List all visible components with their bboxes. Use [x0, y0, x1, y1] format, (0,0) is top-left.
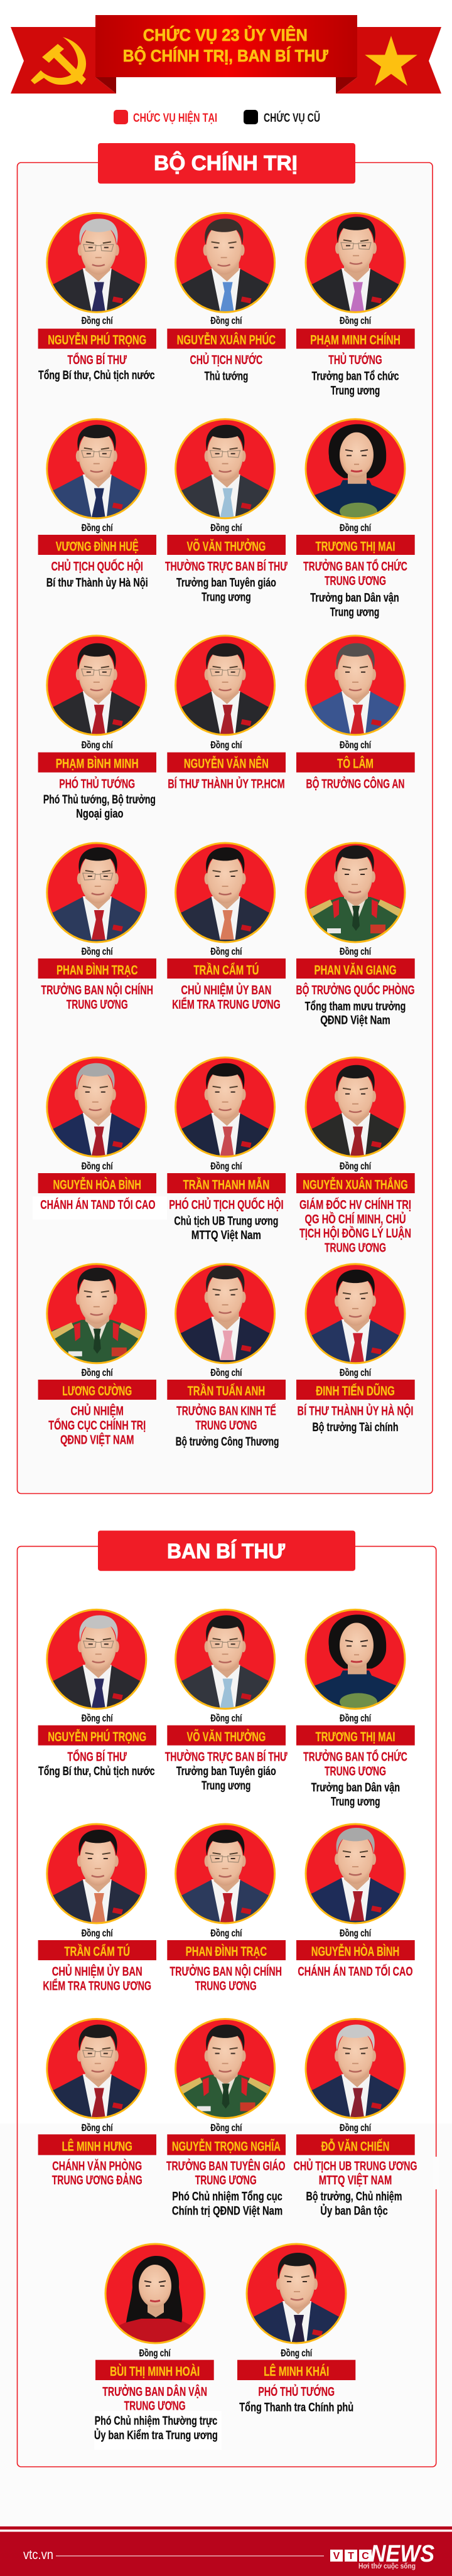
name bar: NGUYỄN HÒA BÌNH — [311, 1943, 399, 1959]
footer rule — [56, 2556, 324, 2557]
label: Đồng chí — [210, 1714, 242, 1724]
current position: PHÓ THỦ TƯỚNG — [258, 2384, 335, 2399]
name bar — [296, 1940, 415, 1960]
portrait — [175, 212, 276, 313]
label: Đồng chí — [210, 316, 242, 326]
source text: vtc.vn — [23, 2548, 53, 2562]
label: Đồng chí — [340, 1368, 372, 1378]
portrait — [46, 842, 147, 943]
portrait — [305, 1056, 406, 1157]
name bar — [296, 2134, 415, 2155]
current position: TRƯỞNG BAN TUYÊN GIÁO — [166, 2159, 286, 2174]
card: Nguyễn Trọng Nghĩa — [166, 2019, 286, 2218]
former position — [311, 369, 399, 398]
portrait — [305, 418, 406, 520]
label: Đồng chí — [82, 2123, 113, 2133]
former position — [176, 1764, 276, 1793]
current position: TRUNG ƯƠNG — [67, 997, 128, 1012]
label: Đồng chí — [82, 1928, 113, 1939]
current position — [294, 2159, 417, 2187]
current position: TỔNG BÍ THƯ — [67, 352, 127, 367]
current position: TRUNG ƯƠNG — [325, 1764, 386, 1778]
former position — [305, 999, 406, 1027]
heading: Bộ Chính trị — [98, 143, 355, 183]
current position: CHÁNH VĂN PHÒNG — [52, 2159, 142, 2174]
current position: CHỦ NHIỆM ỦY BAN — [181, 982, 271, 997]
name bar: PHAN ĐÌNH TRẠC — [56, 962, 137, 978]
name bar — [296, 1173, 415, 1193]
card: Nguyễn Xuân Phúc — [167, 213, 286, 383]
name bar — [296, 1725, 415, 1746]
former position: Chính trị QĐND Việt Nam — [172, 2204, 282, 2218]
name bar: VÕ VĂN THƯỞNG — [187, 1729, 266, 1744]
card: Võ Văn Thưởng — [165, 419, 288, 604]
name bar: NGUYỄN XUÂN PHÚC — [177, 331, 276, 348]
label: Đồng chí — [210, 740, 242, 751]
portrait — [40, 1824, 153, 1930]
former position: Trưởng ban Dân vận — [311, 1781, 400, 1795]
label: Đồng chí — [340, 2123, 372, 2133]
current position: THỦ TƯỚNG — [328, 352, 382, 367]
name bar: NGUYỄN PHÚ TRỌNG — [48, 1728, 146, 1744]
name bar — [95, 2360, 214, 2380]
portrait — [299, 2019, 412, 2125]
former position: Tổng tham mưu trưởng — [305, 999, 406, 1013]
former position: Trung ương — [202, 590, 251, 604]
card: Trương Thị Mai — [296, 1609, 415, 1809]
heading: Bộ Chính trị: BỘ CHÍNH TRỊ — [154, 151, 298, 174]
current position: TRUNG ƯƠNG — [195, 1978, 257, 1993]
current position — [43, 1964, 151, 1993]
label: Đồng chí — [82, 1161, 113, 1172]
current position: TRUNG ƯƠNG ĐẢNG — [52, 2173, 143, 2187]
logo: VTC News: V — [333, 2551, 340, 2562]
current position — [299, 1197, 411, 1255]
name bar — [38, 1173, 156, 1193]
card: Nguyễn Hòa Bình — [38, 1058, 156, 1212]
card: Phạm Bình Minh — [38, 636, 156, 821]
name bar — [38, 2134, 156, 2155]
name bar — [167, 2134, 286, 2155]
current position: TỔNG CỤC CHÍNH TRỊ — [48, 1418, 146, 1433]
name bar: TRẦN CẨM TÚ — [64, 1943, 130, 1959]
current position: TRƯỞNG BAN TỔ CHỨC — [303, 1749, 407, 1764]
card: Tô Lâm — [296, 636, 415, 791]
current position: CHỦ NHIỆM — [70, 1403, 124, 1419]
card: Trần Cẩm Tú — [38, 1824, 156, 1993]
current position: TRUNG ƯƠNG — [195, 1419, 257, 1433]
former position: Chủ tịch UB Trung ương — [174, 1214, 278, 1228]
current position — [48, 1403, 146, 1447]
name bar: LÊ MINH HƯNG — [62, 2138, 132, 2154]
former position: Bộ trưởng Tài chính — [313, 1420, 398, 1434]
card: Nguyễn Phú Trọng — [38, 1609, 156, 1778]
current position: KIỂM TRA TRUNG ƯƠNG — [43, 1978, 151, 1993]
name bar: LÊ MINH KHÁI — [264, 2363, 329, 2379]
former position — [43, 793, 156, 821]
logo: VTC News: T — [348, 2551, 354, 2562]
card: Vương Đình Huệ — [38, 419, 156, 590]
name bar — [167, 1173, 286, 1193]
portrait — [46, 212, 147, 313]
current position: TRƯỞNG BAN DÂN VẬN — [102, 2384, 207, 2399]
former position: Phó Chủ nhiệm Thường trực — [95, 2414, 217, 2428]
name bar: VƯƠNG ĐÌNH HUỆ — [56, 539, 139, 554]
name bar — [167, 753, 286, 773]
current position: TRUNG ƯƠNG — [195, 2173, 257, 2187]
card: Nguyễn Phú Trọng — [38, 213, 156, 382]
card: Lê Minh Hưng — [38, 2019, 156, 2187]
name bar: BÙI THỊ MINH HOÀI — [110, 2363, 200, 2379]
name bar — [38, 1725, 156, 1746]
portrait — [175, 418, 276, 520]
card: Nguyễn Xuân Thắng — [296, 1058, 415, 1255]
name bar — [237, 2360, 355, 2380]
former position: Trung ương — [331, 1795, 380, 1809]
name bar: NGUYỄN PHÚ TRỌNG — [48, 331, 146, 348]
former position: Trưởng ban Dân vận — [310, 591, 399, 605]
former position: Phó Thủ tướng, Bộ trưởng — [43, 793, 156, 807]
current position: PHÓ CHỦ TỊCH QUỐC HỘI — [169, 1197, 284, 1212]
portrait — [175, 635, 276, 736]
name bar: TRẦN THANH MẪN — [183, 1176, 269, 1193]
label: Đồng chí — [82, 1714, 113, 1724]
current position: BỘ TRƯỞNG CÔNG AN — [306, 776, 404, 791]
portrait — [305, 635, 406, 736]
former position: Trưởng ban Tuyên giáo — [176, 576, 276, 590]
portrait — [175, 1056, 276, 1157]
current position — [303, 559, 407, 588]
label: Đồng chí — [210, 2123, 242, 2133]
card: Phan Đình Trạc — [167, 1824, 286, 1993]
former position: Tổng Bí thư, Chủ tịch nước — [38, 1764, 155, 1778]
name bar: ĐỖ VĂN CHIẾN — [321, 2137, 389, 2154]
card: Đinh Tiến Dũng — [296, 1264, 415, 1434]
current position — [176, 1403, 276, 1433]
card: Lê Minh Khái — [237, 2244, 355, 2414]
portrait — [299, 1824, 412, 1928]
portrait — [46, 1608, 147, 1710]
card: Đỗ Văn Chiến — [294, 2019, 439, 2218]
former position: Trưởng ban Tổ chức — [311, 369, 399, 383]
title — [123, 24, 328, 65]
former position: QĐND Việt Nam — [320, 1013, 390, 1027]
banner — [11, 15, 441, 94]
label: Đồng chí — [340, 523, 372, 534]
label: Đồng chí — [82, 947, 113, 957]
portrait — [299, 1609, 412, 1715]
label: Đồng chí — [82, 316, 113, 326]
portrait — [46, 1056, 147, 1157]
current position: TRUNG ƯƠNG — [124, 2398, 186, 2413]
name bar — [296, 535, 415, 555]
legend swatch: former — [244, 110, 258, 124]
name bar: PHAN ĐÌNH TRẠC — [186, 1943, 267, 1959]
current position: TRUNG ƯƠNG — [325, 574, 386, 588]
current position: TỔNG BÍ THƯ — [67, 1749, 127, 1764]
name bar — [38, 1940, 156, 1960]
current position: KIỂM TRA TRUNG ƯƠNG — [172, 997, 281, 1012]
current position: TRƯỞNG BAN NỘI CHÍNH — [41, 982, 153, 997]
former position: Trung ương — [331, 384, 380, 398]
former position — [310, 591, 399, 619]
icon: hammer and sickle — [31, 37, 86, 85]
card: Võ Văn Thưởng — [165, 1609, 288, 1793]
label: Đồng chí — [340, 316, 372, 326]
ribbon centre — [95, 15, 357, 77]
name bar — [167, 535, 286, 555]
portrait — [40, 2019, 153, 2125]
label: Đồng chí — [210, 1161, 242, 1172]
logo: VTC News: Hơi thở cuộc sống — [358, 2562, 416, 2570]
name bar — [167, 329, 286, 349]
current position: TRƯỞNG BAN NỘI CHÍNH — [170, 1964, 282, 1979]
former position: Trung ương — [202, 1779, 250, 1793]
card: Trần Thanh Mẫn — [167, 1058, 286, 1242]
former position: Tổng Thanh tra Chính phủ — [239, 2400, 353, 2414]
former position: Thủ tướng — [205, 369, 248, 383]
current position — [166, 2159, 286, 2187]
label: Đồng chí — [82, 523, 113, 534]
former position: Tổng Bí thư, Chủ tịch nước — [38, 368, 155, 382]
current position — [52, 2159, 143, 2187]
portrait — [46, 1263, 147, 1365]
former position: Ngoại giao — [76, 807, 124, 821]
current position: QG HỒ CHÍ MINH, CHỦ — [305, 1211, 406, 1226]
name bar — [38, 753, 156, 773]
current position — [41, 982, 153, 1012]
name bar: PHẠM BÌNH MINH — [56, 756, 139, 771]
name bar: TRẦN TUẤN ANH — [188, 1383, 265, 1398]
portrait — [46, 635, 147, 736]
right ribbon — [336, 27, 441, 94]
former position: Bộ trưởng Công Thương — [176, 1435, 279, 1449]
current position: CHÁNH ÁN TAND TỐI CAO — [40, 1197, 156, 1212]
portrait — [175, 1263, 276, 1365]
name bar — [296, 1380, 415, 1400]
current position — [303, 1749, 407, 1778]
card: Trần Tuấn Anh — [167, 1264, 286, 1449]
label: Đồng chí — [210, 947, 242, 957]
former position: Trưởng ban Tuyên giáo — [176, 1764, 276, 1778]
white patch — [94, 2411, 222, 2450]
label: Đồng chí — [82, 740, 113, 751]
former position: Phó Chủ nhiệm Tổng cục — [172, 2189, 282, 2203]
footer — [0, 2526, 452, 2576]
footer gap — [0, 2530, 452, 2532]
label: Đồng chí — [210, 1928, 242, 1939]
legend label: current: CHỨC VỤ HIỆN TẠI — [133, 111, 217, 125]
portrait — [175, 1608, 276, 1710]
former position — [172, 2189, 282, 2218]
current position — [170, 1964, 282, 1993]
label: Đồng chí — [281, 2348, 313, 2359]
former position: Ủy ban Dân tộc — [320, 2203, 388, 2218]
current position: CHỦ NHIỆM ỦY BAN — [52, 1964, 143, 1979]
portrait — [169, 1824, 282, 1930]
former position: Bí thư Thành ủy Hà Nội — [46, 576, 148, 590]
label: Đồng chí — [340, 1714, 372, 1724]
current position: GIÁM ĐỐC HV CHÍNH TRỊ — [299, 1197, 411, 1212]
heading: Ban Bí thư — [98, 1530, 355, 1571]
name bar — [38, 958, 156, 979]
left ribbon — [11, 27, 116, 94]
current position — [102, 2384, 207, 2413]
label: Đồng chí — [340, 1928, 372, 1939]
current position: QĐND VIỆT NAM — [60, 1432, 134, 1447]
label: Đồng chí — [340, 947, 372, 957]
panel: Ban Bí thư — [18, 1547, 436, 2467]
former position — [306, 2189, 402, 2218]
portrait — [305, 842, 406, 943]
name bar — [38, 535, 156, 555]
label: Đồng chí — [210, 523, 242, 534]
name bar: PHAN VĂN GIANG — [314, 962, 397, 978]
name bar — [296, 329, 415, 349]
portrait — [99, 2244, 212, 2350]
current position: CHỦ TỊCH NƯỚC — [190, 352, 262, 367]
name bar: NGUYỄN XUÂN THẮNG — [303, 1176, 408, 1193]
logo: VTC News: C — [362, 2551, 369, 2562]
footer band — [0, 2532, 452, 2576]
name bar: TRƯƠNG THỊ MAI — [315, 539, 396, 554]
name bar — [296, 958, 415, 979]
card: Phạm Minh Chính — [296, 213, 415, 398]
name bar: ĐINH TIẾN DŨNG — [316, 1383, 395, 1398]
former position: Trung ương — [330, 605, 379, 619]
title: BỘ CHÍNH TRỊ, BAN BÍ THƯ — [123, 46, 328, 65]
card: Trần Cẩm Tú — [167, 843, 286, 1012]
name bar: NGUYỄN TRỌNG NGHĨA — [172, 2137, 281, 2154]
name bar: PHẠM MINH CHÍNH — [310, 331, 401, 348]
label: Đồng chí — [340, 740, 372, 751]
name bar: NGUYỄN VĂN NÊN — [184, 754, 269, 771]
former position: MTTQ Việt Nam — [191, 1228, 261, 1242]
name bar — [38, 1380, 156, 1400]
name bar — [167, 958, 286, 979]
current position: BÍ THƯ THÀNH ỦY TP.HCM — [168, 776, 285, 791]
footer stripe — [0, 2526, 452, 2530]
card: Nguyễn Hòa Bình — [296, 1824, 415, 1979]
page background lower — [0, 2123, 452, 2576]
former position — [311, 1781, 400, 1809]
former position: Bộ trưởng, Chủ nhiệm — [306, 2189, 402, 2203]
legend — [114, 110, 320, 125]
current position: MTTQ VIỆT NAM — [319, 2172, 392, 2187]
name bar — [167, 1940, 286, 1960]
card: Nguyễn Văn Nên — [167, 636, 286, 791]
card: Bùi Thị Minh Hoài — [94, 2244, 218, 2442]
portrait — [240, 2244, 353, 2352]
name bar: TRẦN CẨM TÚ — [193, 962, 259, 978]
label: Đồng chí — [139, 2348, 171, 2359]
former position — [94, 2414, 218, 2442]
name bar — [38, 329, 156, 349]
legend swatch: current — [114, 110, 128, 124]
name bar — [167, 1380, 286, 1400]
portrait — [305, 1263, 406, 1365]
name bar: TRƯƠNG THỊ MAI — [315, 1729, 396, 1744]
current position: TRUNG ƯƠNG — [325, 1240, 386, 1255]
current position — [172, 982, 281, 1012]
label: Đồng chí — [82, 1368, 113, 1378]
current position: TRƯỞNG BAN TỔ CHỨC — [303, 559, 407, 574]
portrait — [175, 842, 276, 943]
current position: THƯỜNG TRỰC BAN BÍ THƯ — [165, 1749, 288, 1764]
portrait — [305, 212, 406, 313]
name bar — [167, 1725, 286, 1746]
name bar — [296, 753, 415, 773]
card: Phan Đình Trạc — [38, 843, 156, 1012]
former position — [176, 576, 276, 604]
legend label: former: CHỨC VỤ CŨ — [264, 111, 320, 125]
label: Đồng chí — [340, 1161, 372, 1172]
current position: CHỦ TỊCH QUỐC HỘI — [51, 559, 143, 574]
logo: VTC News — [330, 2541, 434, 2570]
title: CHỨC VỤ 23 ỦY VIÊN — [143, 24, 308, 45]
name bar: VÕ VĂN THƯỞNG — [187, 539, 266, 554]
panel: Bộ Chính trị — [18, 163, 433, 1494]
former position — [174, 1214, 278, 1242]
card: Phan Văn Giang — [296, 843, 415, 1027]
card: Lương Cường — [38, 1264, 156, 1447]
card: Trương Thị Mai — [296, 419, 415, 619]
former position: Ủy ban Kiểm tra Trung ương — [94, 2427, 218, 2442]
portrait — [46, 418, 147, 520]
white patch over border — [433, 2157, 439, 2189]
ribbon folds — [95, 77, 357, 94]
name bar: TÔ LÂM — [337, 756, 374, 771]
icon: star — [365, 36, 417, 86]
current position: PHÓ THỦ TƯỚNG — [59, 776, 135, 791]
current position: TRƯỞNG BAN KINH TẾ — [176, 1403, 276, 1419]
label: Đồng chí — [210, 1368, 242, 1378]
portrait — [169, 2019, 282, 2125]
heading: Ban Bí thư: BAN BÍ THƯ — [167, 1540, 286, 1563]
logo: VTC News: NEWS — [370, 2541, 434, 2567]
white patch — [33, 1196, 167, 1220]
current position: THƯỜNG TRỰC BAN BÍ THƯ — [165, 559, 288, 574]
name bar: LƯƠNG CƯỜNG — [62, 1383, 132, 1398]
name bar: NGUYỄN HÒA BÌNH — [53, 1176, 141, 1193]
